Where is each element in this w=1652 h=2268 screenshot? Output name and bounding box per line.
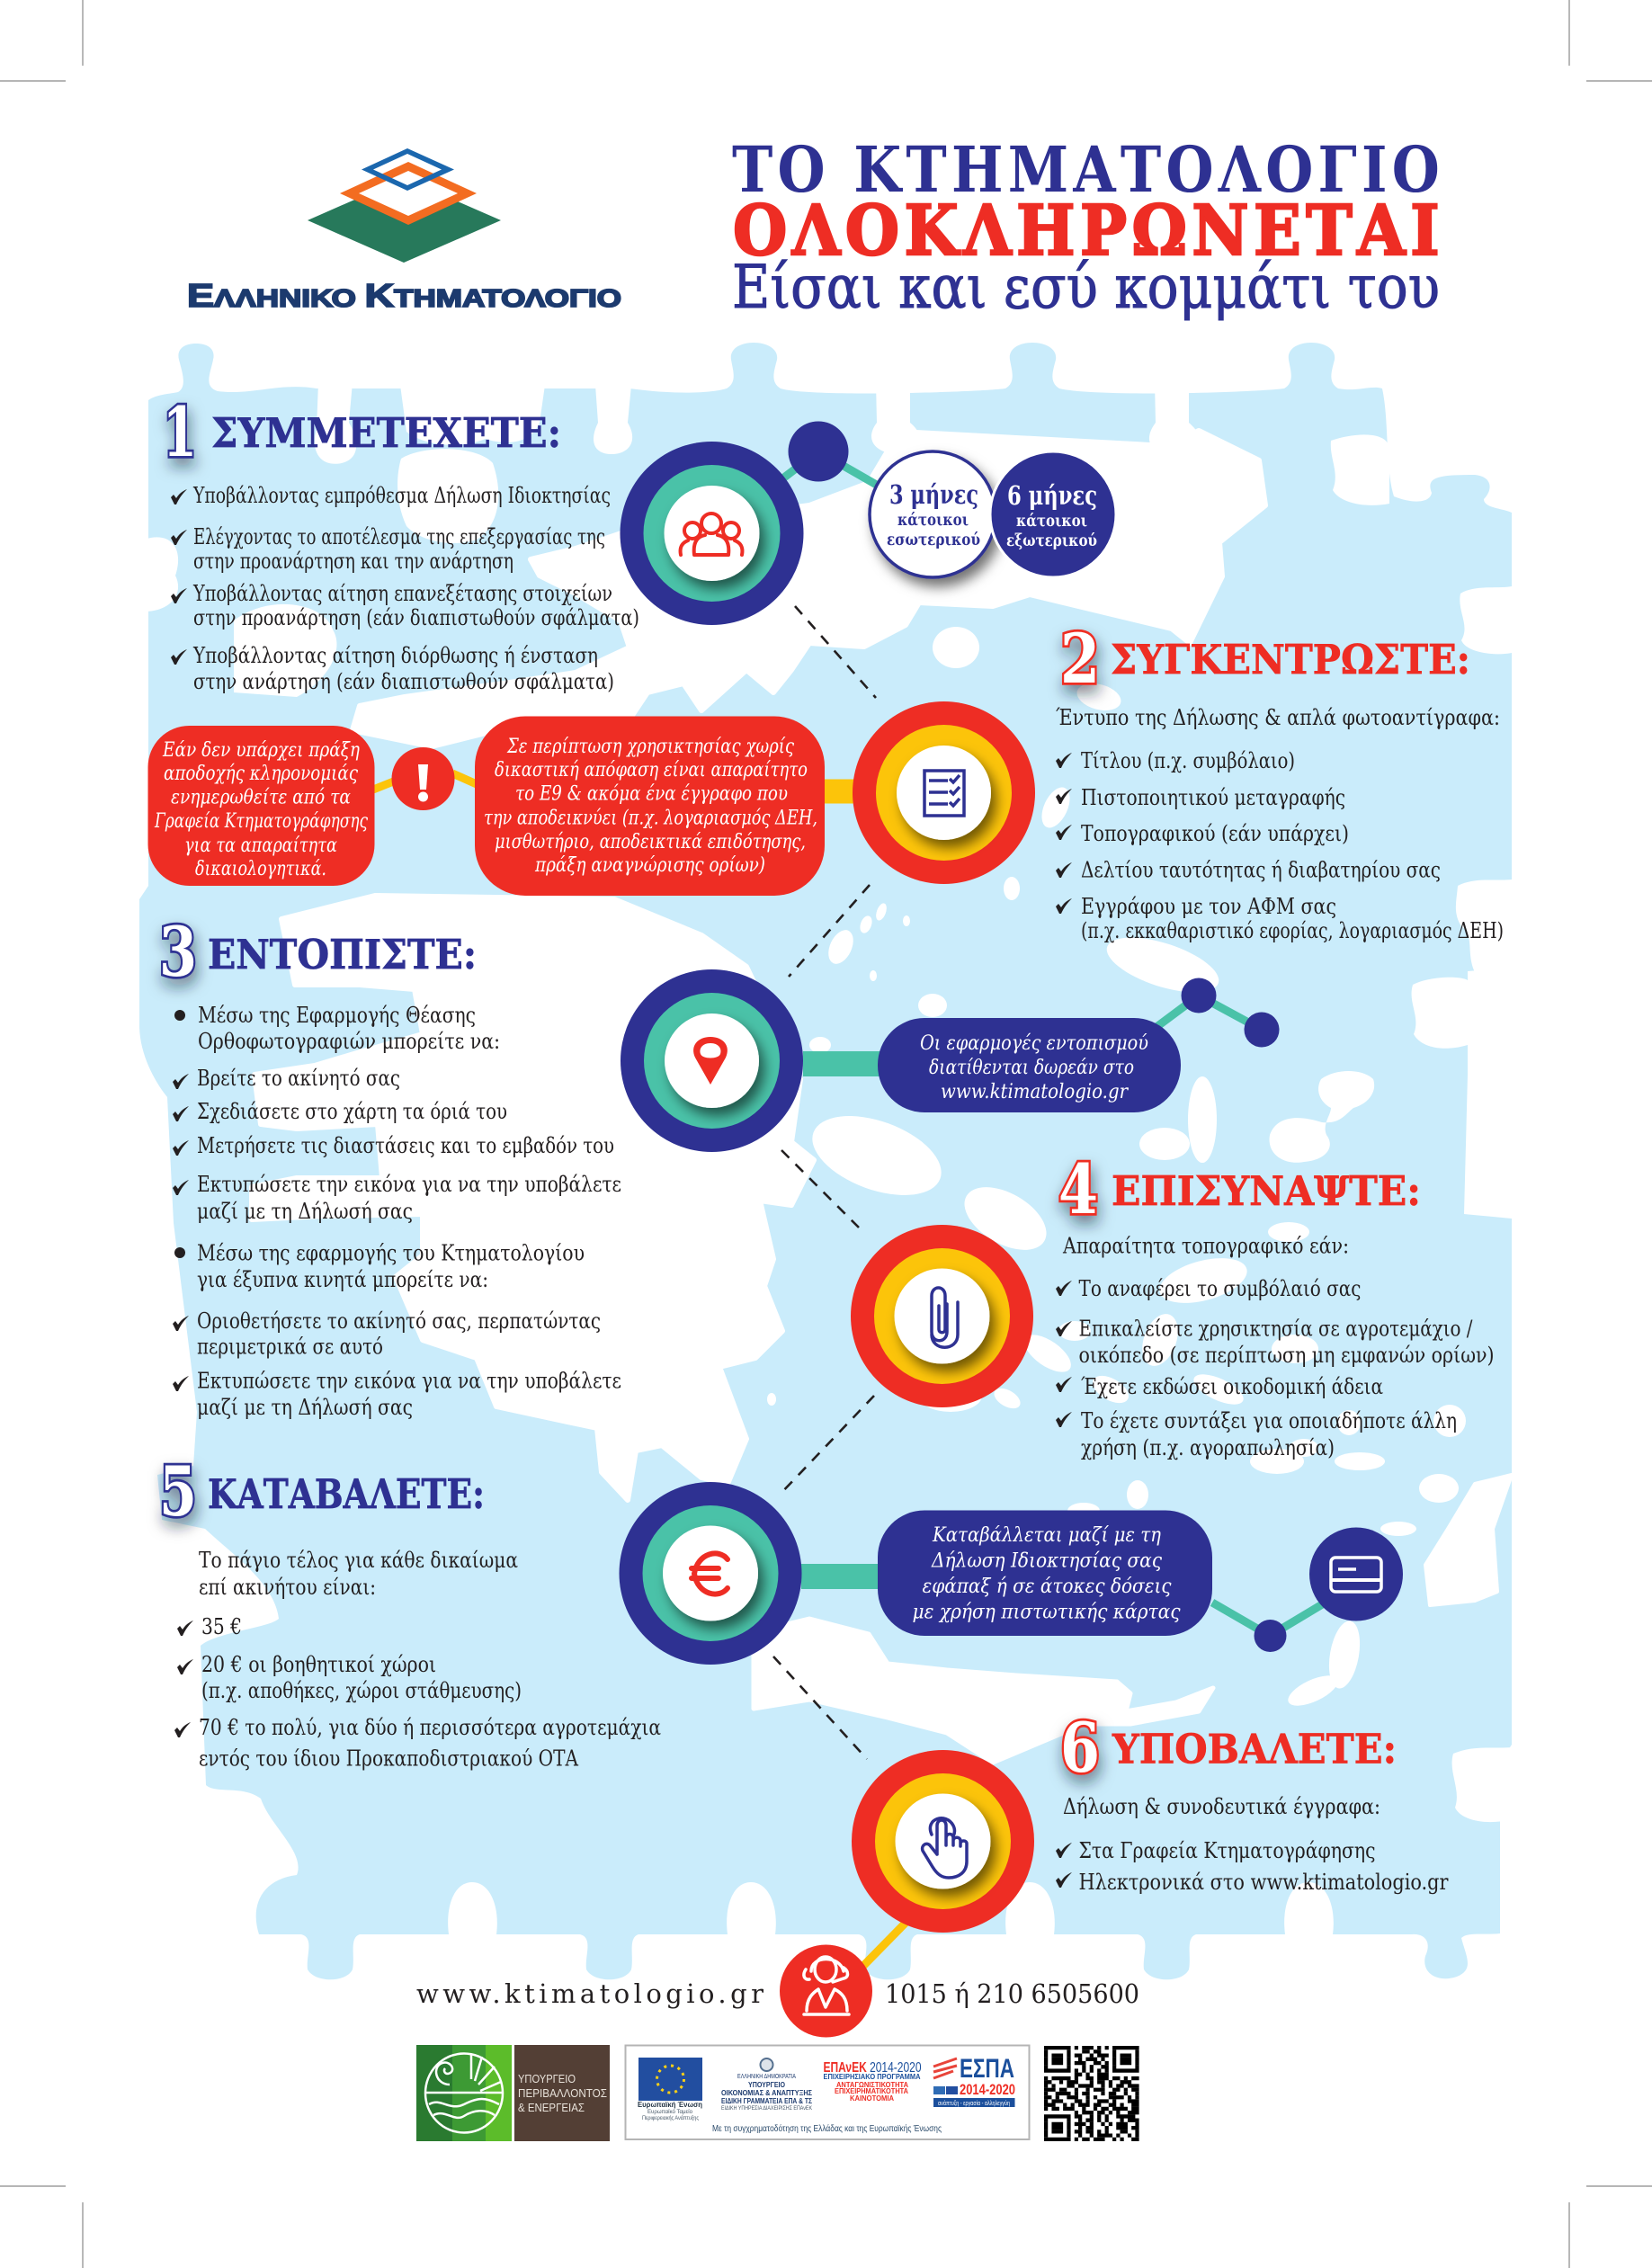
land: central Greece and Peloponnese [252, 896, 814, 1500]
callout: usucaption note: πράξη αναγνώρισης ορίων) [534, 854, 765, 877]
section 6: ΥΠΟΒΑΛΕΤΕ [1056, 1708, 1449, 1895]
heading 6: ΥΠΟΒΑΛΕΤΕ: [1112, 1725, 1397, 1773]
list 3: Μέσω της εφαρμογής του Κτηματολογίου [197, 1241, 585, 1266]
list 3: Μετρήσετε τις διαστάσεις και το εμβαδόν του [197, 1133, 614, 1158]
number 4: 4 [1058, 1149, 1098, 1229]
icon: pointing hand [923, 1818, 967, 1878]
EU flag: Ευρωπαϊκό Ταμείο [647, 2109, 693, 2115]
pill: payment [878, 1511, 1212, 1636]
list 1: στην ανάρτηση (εάν διαπιστωθούν σφάλματα) [193, 669, 614, 694]
callout: usucaption note [475, 716, 825, 896]
list 3: Οριοθετήσετε το ακίνητό σας, περπατώντας [197, 1308, 601, 1334]
phone: 1015 ή 210 6505600 [885, 1978, 1139, 2009]
list 2: Τοπογραφικού (εάν υπάρχει) [1081, 821, 1349, 846]
ministry name: & ΕΝΕΡΓΕΙΑΣ [518, 2101, 585, 2114]
callout: inheritance note: Γραφεία Κτηματογράφησης [154, 810, 369, 833]
pill: free apps: Οι εφαρμογές εντοπισμού [920, 1032, 1148, 1055]
ESPA block [933, 2054, 1015, 2107]
list 1: στην προανάρτηση (εάν διαπιστωθούν σφάλματα) [193, 605, 639, 630]
callout: usucaption note: Σε περίπτωση χρησικτησίας χωρίς [506, 736, 795, 758]
section 1: ΣΥΜΜΕΤΕΧΕΤΕ [163, 392, 639, 694]
section 4: ΕΠΙΣΥΝΑΨΤΕ [1056, 1149, 1495, 1460]
land: Asia Minor coast and islands [1425, 1475, 1512, 1605]
list 6: Στα Γραφεία Κτηματογράφησης [1079, 1838, 1376, 1863]
list 4: οικόπεδο (σε περίπτωση μη εμφανών ορίων) [1079, 1343, 1495, 1368]
badge: 6 months: εξωτερικού [1006, 531, 1097, 550]
list 2: Πιστοποιητικού μεταγραφής [1081, 785, 1345, 810]
EPANEK block [824, 2060, 922, 2103]
list 4: Το αναφέρει το συμβόλαιό σας [1079, 1276, 1362, 1301]
ESPA block: 2014-2020 [960, 2081, 1015, 2098]
list 3: Βρείτε το ακίνητό σας [197, 1066, 400, 1091]
badge: 6 months [990, 451, 1116, 577]
list 5: 70 € το πολύ, για δύο ή περισσότερα αγροτεμάχια [199, 1715, 661, 1740]
icon: credit card [1309, 1527, 1403, 1621]
ministry of economy: ΕΙΔΙΚΗ ΥΠΗΡΕΣΙΑ ΔΙΑΧΕΙΡΙΣΗΣ ΕΠΑνΕΚ [721, 2106, 812, 2112]
pill: payment: Καταβάλλεται μαζί με τη [932, 1524, 1161, 1547]
list 2: Δελτίου ταυτότητας ή διαβατηρίου σας [1081, 858, 1441, 883]
callout: dot and months [788, 421, 1116, 577]
number 5: 5 [159, 1451, 197, 1531]
circle 6: hand icon [852, 1750, 1034, 1933]
list 1: στην προανάρτηση και την ανάρτηση [193, 549, 513, 574]
sponsors strip [626, 2045, 1029, 2139]
callout: inheritance note: αποδοχής κληρονομιάς [164, 763, 359, 785]
number 2: 2 [1060, 619, 1100, 699]
list 5: 35 € [201, 1614, 242, 1639]
list 4 [1056, 1234, 1495, 1460]
list 3: περιμετρικά σε αυτό [197, 1335, 383, 1360]
icon: euro [692, 1553, 728, 1594]
dot: payment connector [1254, 1620, 1286, 1652]
title: Είσαι και εσύ κομμάτι του [732, 253, 1440, 322]
EU flag [638, 2058, 702, 2121]
list 3: Εκτυπώσετε την εικόνα για να την υποβάλετε [197, 1369, 621, 1394]
dots: free apps connector [1182, 978, 1279, 1047]
ESPA block: ΕΣΠΑ [960, 2054, 1014, 2084]
icon: paperclip [932, 1288, 958, 1347]
ministry of economy: ΥΠΟΥΡΓΕΙΟ [748, 2081, 785, 2089]
pill: free apps: διατίθενται δωρεάν στο [929, 1057, 1134, 1079]
icon: headset support [780, 1944, 872, 2038]
list 2: (π.χ. εκκαθαριστικό εφορίας, λογαριασμός ΔΕΗ) [1081, 918, 1504, 943]
ministry of economy: ΕΙΔΙΚΗ ΓΡΑΜΜΑΤΕΙΑ ΕΠΑ & ΤΣ [721, 2097, 812, 2105]
ministry of economy: ΕΛΛΗΝΙΚΗ ΔΗΜΟΚΡΑΤΙΑ [737, 2074, 796, 2080]
land: northern Greece and Thrace [353, 431, 1265, 746]
circle 1: people icon [621, 442, 804, 625]
pill: payment: με χρήση πιστωτικής κάρτας [912, 1601, 1181, 1624]
list 1: Υποβάλλοντας εμπρόθεσμα Δήλωση Ιδιοκτησίας [192, 483, 611, 508]
ministry logo [416, 2045, 610, 2141]
list 5: επί ακινήτου είναι: [199, 1575, 376, 1600]
EPANEK block: ΕΠΙΧΕΙΡΗΜΑΤΙΚΟΤΗΤΑ [835, 2087, 908, 2095]
list 2: Τίτλου (π.χ. συμβόλαιο) [1081, 748, 1295, 773]
ministry of economy [721, 2058, 812, 2112]
connector bars [373, 451, 1324, 1968]
heading 3: ΕΝΤΟΠΙΣΤΕ: [208, 931, 477, 978]
heading 2: ΣΥΓΚΕΝΤΡΩΣΤΕ: [1111, 636, 1470, 683]
list 6: Δήλωση & συνοδευτικά έγγραφα: [1063, 1794, 1380, 1819]
callout: inheritance note: δικαιολογητικά. [195, 858, 326, 880]
callout: inheritance note: Εάν δεν υπάρχει πράξη [162, 739, 360, 762]
cofinancing note: Με τη συγχρηματοδότηση της Ελλάδας και της Ευρωπαϊκής Ένωσης [712, 2123, 942, 2134]
EPANEK block: ΕΠΙΧΕΙΡΗΣΙΑΚΟ ΠΡΟΓΡΑΜΜΑ [824, 2073, 921, 2081]
footer contact [416, 1944, 1139, 2038]
list 3: για έξυπνα κινητά μπορείτε να: [197, 1267, 488, 1292]
badge: 3 months: 3 μήνες [889, 479, 978, 510]
EU flag: Ευρωπαϊκή Ένωση [638, 2101, 702, 2109]
list 4: Έχετε εκδώσει οικοδομική άδεια [1081, 1374, 1383, 1399]
list 3: Εκτυπώσετε την εικόνα για να την υποβάλετε [197, 1172, 621, 1197]
list 1 [171, 483, 639, 694]
heading 5: ΚΑΤΑΒΑΛΕΤΕ: [208, 1470, 485, 1518]
title [732, 132, 1444, 322]
pill: free apps: www.ktimatologio.gr [941, 1081, 1129, 1103]
list 1: Ελέγχοντας το αποτέλεσμα της επεξεργασίας της [193, 524, 605, 549]
dot [788, 421, 849, 482]
list 5 [174, 1548, 661, 1772]
list 4: Επικαλείστε χρησικτησία σε αγροτεμάχιο / [1079, 1317, 1473, 1342]
website: www.ktimatologio.gr [416, 1978, 763, 2009]
connector dashed lines [773, 606, 876, 1759]
QR code [1044, 2048, 1139, 2139]
list 2: Εγγράφου με τον ΑΦΜ σας [1081, 894, 1336, 919]
title: ΤΟ ΚΤΗΜΑΤΟΛΟΓΙΟ [732, 132, 1444, 207]
title: ΟΛΟΚΛΗΡΩΝΕΤΑΙ [733, 191, 1444, 272]
list 3 [173, 1003, 621, 1420]
ministry name: ΠΕΡΙΒΑΛΛΟΝΤΟΣ [518, 2086, 607, 2100]
icon: checklist [924, 771, 964, 816]
EU flag: Περιφερειακής Ανάπτυξης [642, 2115, 699, 2121]
section 5: ΚΑΤΑΒΑΛΕΤΕ [159, 1451, 661, 1772]
list 1: Υποβάλλοντας αίτηση επανεξέτασης στοιχείων [192, 581, 612, 606]
land: Crete [754, 1619, 1213, 1763]
section 2: ΣΥΓΚΕΝΤΡΩΣΤΕ [1056, 619, 1504, 943]
background: puzzle map of Greece [139, 343, 1512, 1979]
icon: map pin [693, 1037, 728, 1085]
list 4: Το έχετε συντάξει για οποιαδήποτε άλλη [1081, 1408, 1457, 1433]
list 6 [1056, 1794, 1449, 1895]
list 2: Έντυπο της Δήλωσης & απλά φωτοαντίγραφα: [1056, 705, 1500, 730]
list 3: Μέσω της Εφαρμογής Θέασης [198, 1003, 476, 1028]
white puzzle knobs and slits [144, 382, 1512, 1934]
pill: payment: Δήλωση Ιδιοκτησίας σας [931, 1550, 1163, 1572]
EPANEK block: ΕΠΑνΕΚ 2014-2020 [824, 2060, 922, 2076]
list 5: Το πάγιο τέλος για κάθε δικαίωμα [199, 1548, 518, 1573]
icon: people [681, 513, 742, 555]
EPANEK block: ΚΑΙΝΟΤΟΜΙΑ [850, 2094, 894, 2103]
list 6: Ηλεκτρονικά στο www.ktimatologio.gr [1079, 1870, 1449, 1895]
callout: inheritance note [147, 726, 374, 886]
list 2 [1056, 705, 1504, 943]
ministry name: ΥΠΟΥΡΓΕΙΟ [518, 2072, 576, 2085]
badge: 3 months: εσωτερικού [887, 530, 980, 549]
list 1: Υποβάλλοντας αίτηση διόρθωσης ή ένσταση [192, 643, 598, 668]
heading 4: ΕΠΙΣΥΝΑΨΤΕ: [1112, 1167, 1421, 1215]
icon: exclamation [392, 747, 455, 810]
circle 5: euro icon [619, 1482, 802, 1665]
number 3: 3 [159, 912, 197, 992]
badge: 6 months: 6 μήνες [1007, 480, 1097, 511]
list 5: (π.χ. αποθήκες, χώροι στάθμευσης) [201, 1678, 522, 1703]
callout: usucaption note: το Ε9 & ακόμα ένα έγγραφο που [515, 782, 788, 806]
ministry emblem [425, 2054, 503, 2133]
logo mark diamonds [308, 148, 501, 263]
badge: 6 months: κάτοικοι [1016, 511, 1087, 531]
ministry name [518, 2072, 607, 2114]
callout: usucaption note: δικαστική απόφαση είναι απαραίτητο [495, 759, 808, 781]
circle 2: checklist icon [853, 701, 1035, 884]
list 3: Ορθοφωτογραφιών μπορείτε να: [198, 1029, 500, 1054]
list 3: μαζί με τη Δήλωσή σας [197, 1199, 413, 1224]
ESPA block: ανάπτυξη - εργασία - αλληλεγγύη [938, 2100, 1010, 2107]
pill: free apps [878, 1018, 1181, 1112]
badge: 3 months: κάτοικοι [897, 510, 969, 530]
logo wordmark: ΕΛΛΗΝΙΚΟ ΚΤΗΜΑΤΟΛΟΓΙΟ [187, 277, 621, 314]
list 3: Σχεδιάσετε στο χάρτη τα όριά του [197, 1099, 507, 1124]
EPANEK block: ΑΝΤΑΓΩΝΙΣΤΙΚΟΤΗΤΑ [836, 2081, 908, 2089]
pill: payment: εφάπαξ ή σε άτοκες δόσεις [923, 1576, 1172, 1598]
circle 3: pin icon [621, 969, 803, 1152]
ministry of economy: ΟΙΚΟΝΟΜΙΑΣ & ΑΝΑΠΤΥΞΗΣ [721, 2089, 812, 2097]
callout: inheritance note: για τα απαραίτητα [184, 835, 337, 857]
callout: inheritance note: ενημερωθείτε από τα [171, 786, 351, 809]
number 6: 6 [1060, 1708, 1100, 1788]
section 3: ΕΝΤΟΠΙΣΤΕ [159, 912, 621, 1420]
badge: 3 months [870, 451, 996, 577]
list 5: εντός του ίδιου Προκαποδιστριακού ΟΤΑ [199, 1746, 579, 1772]
list 5: 20 € οι βοηθητικοί χώροι [201, 1652, 436, 1677]
logo: Ελληνικό Κτηματολόγιο [187, 148, 621, 314]
list 3: μαζί με τη Δήλωσή σας [197, 1395, 413, 1420]
number 1: 1 [163, 392, 197, 472]
heading 1: ΣΥΜΜΕΤΕΧΕΤΕ: [211, 409, 561, 457]
callout: usucaption note: μισθωτήριο, αποδεικτικά επιδότησης, [495, 831, 806, 853]
callout: usucaption note: την αποδεικνύει (π.χ. λογαριασμός ΔΕΗ, [484, 808, 817, 829]
circle 4: paperclip icon [851, 1225, 1033, 1407]
list 4: χρήση (π.χ. αγοραπωλησία) [1081, 1435, 1335, 1460]
list 4: Απαραίτητα τοπογραφικό εάν: [1062, 1234, 1349, 1259]
